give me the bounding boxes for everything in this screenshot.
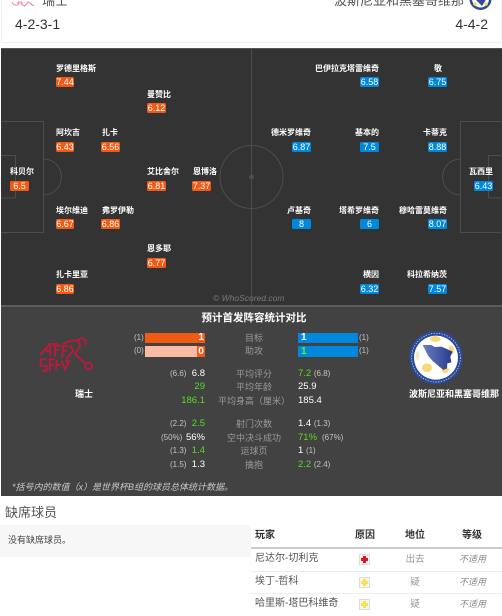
away goals bar: 1 <box>301 332 307 343</box>
player: 卡蒂克 <box>423 128 447 152</box>
icon: doubtful yellow cross <box>359 577 370 588</box>
player: 扎卡里亚: 扎卡里亚 <box>56 270 88 279</box>
stat: average age <box>194 381 316 392</box>
stat: tackles: 2.2 (2.4) <box>298 459 330 470</box>
stat: average rating: 7.2 (6.8) <box>298 368 330 379</box>
stat: average age: 平均年龄 <box>236 382 272 392</box>
player: 穆哈雷莫维奇: 穆哈雷莫维奇 <box>399 206 447 215</box>
row: 埃丁-哲科: 不适用 <box>459 577 486 587</box>
stat: average age: 25.9 <box>298 381 316 392</box>
player: 阿坎吉: 阿坎吉 <box>56 128 80 137</box>
player: 敬: 6.75 <box>429 77 446 87</box>
player: 科贝尔: 科贝尔 <box>10 167 34 176</box>
player: 横因: 横因 <box>363 270 379 279</box>
player: 阿坎吉: 6.43 <box>56 142 74 152</box>
stat: average age: 29 <box>194 381 205 392</box>
watermark: © WhoScored.com <box>213 293 284 303</box>
player: 横因 <box>360 270 379 294</box>
player: 卢基奇 <box>287 206 311 229</box>
header card: match teams and formations <box>1 0 502 43</box>
table headers: 地位 <box>405 530 425 541</box>
player: 塔希罗维奇 <box>339 206 379 229</box>
home crest <box>39 337 93 372</box>
stat: dribbles: 1.4 <box>192 445 205 456</box>
player: 巴伊拉克塔雷维奇: 6.58 <box>361 77 378 87</box>
player: 扎卡: 6.56 <box>102 142 119 152</box>
player: 巴伊拉克塔雷维奇 <box>315 64 379 87</box>
assists home prior: (0) <box>134 346 144 355</box>
stat: average height: 185.4 <box>298 395 322 406</box>
away assists bar: 1 <box>301 346 307 357</box>
table headers <box>255 528 482 541</box>
away team label: 波斯尼亚和黑塞哥维那 <box>409 389 499 399</box>
away formation: 4-4-2 <box>455 16 488 32</box>
stat: dribbles: (1.3) <box>170 446 186 455</box>
player: 埃尔维迪: 6.67 <box>56 219 74 229</box>
no missing players box <box>0 525 251 557</box>
away team players <box>271 64 493 294</box>
table header underline <box>251 547 502 549</box>
player: 扎卡: 扎卡 <box>102 128 118 137</box>
stats panel <box>1 305 502 496</box>
player: 瓦西里: 6.43 <box>475 181 492 191</box>
player: 卢基奇: 卢基奇 <box>287 206 311 215</box>
player: 塔希罗维奇: 6 <box>367 219 372 229</box>
stat: aerials won: 56% <box>186 432 205 443</box>
player: 扎卡里亚 <box>56 270 88 294</box>
player: 塔希罗维奇: 塔希罗维奇 <box>339 206 379 215</box>
player: 恩多耶: 恩多耶 <box>147 244 171 253</box>
row: 哈里斯-塔巴科维奇: 不适用 <box>459 599 486 609</box>
goals home prior: (1) <box>134 333 144 342</box>
row: 尼达尔-切利克: 出去 <box>405 554 424 565</box>
row: 埃丁-哲科 <box>0 576 502 590</box>
row: 哈里斯-塔巴科维奇: 哈里斯-塔巴科维奇 <box>255 598 338 609</box>
player: 恩多耶: 6.77 <box>148 258 165 268</box>
pitch lines <box>1 49 501 305</box>
home formation: 4-2-3-1 <box>15 16 60 32</box>
row: 尼达尔-切利克 <box>0 553 502 567</box>
player: 瓦西里 <box>469 167 493 191</box>
player: 卡蒂克: 8.88 <box>429 142 446 152</box>
player: 基本的: 7.5 <box>363 142 376 152</box>
player: 恩博洛: 恩博洛 <box>193 167 217 176</box>
icon: injury red cross <box>359 554 370 565</box>
assists comparison <box>134 346 369 357</box>
player: 罗德里格斯: 罗德里格斯 <box>56 64 96 73</box>
goals comparison <box>134 332 369 343</box>
row: 哈里斯-塔巴科维奇: 疑 <box>410 599 420 610</box>
stat: average height <box>181 395 322 406</box>
goals label: 目标 <box>245 333 263 343</box>
player: 卡蒂克: 卡蒂克 <box>423 128 447 137</box>
player: 巴伊拉克塔雷维奇: 巴伊拉克塔雷维奇 <box>315 64 379 73</box>
stat: average rating: 6.8 <box>192 368 205 379</box>
stat: tackles: 擒抱 <box>245 460 263 470</box>
player: 基本的 <box>355 128 379 152</box>
footnote: *括号内的数值（x）是世界杯B组的球员总体统计数据。 <box>12 482 233 492</box>
player: 罗德里格斯: 7.44 <box>56 77 74 87</box>
stats title: 预计首发阵容统计对比 <box>202 312 306 324</box>
player: 横因: 6.32 <box>361 284 378 294</box>
stat: average rating <box>170 368 330 379</box>
player: 扎卡里亚: 6.86 <box>56 284 74 294</box>
icon: doubtful yellow cross <box>359 599 370 610</box>
player: 埃尔维迪: 埃尔维迪 <box>56 206 88 215</box>
home goals bar <box>145 333 205 343</box>
home assists bar: 0 <box>198 346 204 357</box>
player: 基本的: 基本的 <box>355 128 379 137</box>
stat: aerials won <box>161 432 343 443</box>
home assists bar <box>145 346 205 357</box>
player: 瓦西里: 瓦西里 <box>469 167 493 176</box>
stat: aerials won: (67%) <box>322 433 343 442</box>
player: 科拉希纳茨: 科拉希纳茨 <box>407 270 447 279</box>
stat: tackles: (1.5) <box>170 460 186 469</box>
stat: shots: 射门次数 <box>236 419 272 429</box>
home team players <box>10 64 217 294</box>
player: 敬: 敬 <box>434 64 442 73</box>
stat: average rating: 平均评分 <box>236 369 272 379</box>
stat: average rating: (6.6) <box>170 369 186 378</box>
player: 罗德里格斯 <box>56 64 96 87</box>
player: 恩博洛: 7.37 <box>193 181 210 191</box>
player: 恩博洛 <box>192 167 217 191</box>
stat: shots: 1.4 (1.3) <box>298 418 330 429</box>
stat: tackles: 1.3 <box>192 459 205 470</box>
player: 弗罗伊勒 <box>101 206 134 229</box>
icon: home crest in header <box>12 0 34 7</box>
table headers: 原因 <box>355 530 375 541</box>
player: 埃尔维迪 <box>56 206 88 229</box>
table headers: 等级 <box>462 530 482 541</box>
goals away prior: (1) <box>359 333 369 342</box>
stat: tackles <box>170 459 330 470</box>
table headers: 玩家 <box>255 530 275 541</box>
missing players heading: 缺席球员 <box>5 505 57 520</box>
stat: shots: (2.2) <box>170 419 186 428</box>
player: 科贝尔 <box>10 167 34 191</box>
player: 弗罗伊勒: 6.86 <box>102 219 119 229</box>
player: 阿坎吉 <box>56 128 80 152</box>
player: 科贝尔: 6.5 <box>13 181 26 191</box>
stat: dribbles <box>170 445 316 456</box>
away goals bar <box>298 333 358 343</box>
player: 曼赞比 <box>147 90 171 113</box>
stat: dribbles: 运球页 <box>240 446 268 456</box>
stat: dribbles: 1 (1) <box>298 445 316 456</box>
player: 穆哈雷莫维奇: 8.07 <box>429 219 446 229</box>
player: 敬 <box>428 64 447 87</box>
player: 穆哈雷莫维奇 <box>399 206 447 229</box>
player: 艾比舍尔: 艾比舍尔 <box>147 167 179 176</box>
stat: shots: 2.5 <box>192 418 205 429</box>
assists label: 助攻 <box>245 346 263 356</box>
player: 德米罗维奇 <box>271 128 311 152</box>
row: 哈里斯-塔巴科维奇 <box>0 598 502 612</box>
player: 德米罗维奇: 德米罗维奇 <box>271 128 311 137</box>
stat: shots <box>170 418 330 429</box>
stat: aerials won: 空中决斗成功 <box>227 433 281 443</box>
player: 弗罗伊勒: 弗罗伊勒 <box>102 206 134 215</box>
player: 扎卡 <box>101 128 120 152</box>
player: 德米罗维奇: 6.87 <box>293 142 310 152</box>
row: 埃丁-哲科: 疑 <box>410 577 420 588</box>
away crest <box>409 331 463 384</box>
stat: average height: 平均身高（厘米） <box>218 396 290 406</box>
stat: average height: 186.1 <box>181 395 205 406</box>
no missing players text: 没有缺席球员。 <box>8 535 71 545</box>
home goals bar: 1 <box>198 332 204 343</box>
home team label: 瑞士 <box>75 389 93 399</box>
player: 曼赞比: 曼赞比 <box>147 90 171 99</box>
player: 曼赞比: 6.12 <box>148 103 165 113</box>
row: 尼达尔-切利克: 不适用 <box>459 554 486 564</box>
pitch panel <box>1 48 502 306</box>
player: 科拉希纳茨: 7.57 <box>429 284 446 294</box>
away assists bar <box>298 346 358 357</box>
stat: aerials won: (50%) <box>161 433 182 442</box>
player: 卢基奇: 8 <box>299 219 304 229</box>
stat: aerials won: 71% <box>298 432 317 443</box>
player: 科拉希纳茨 <box>407 270 447 294</box>
icon: away crest in header <box>470 0 492 10</box>
player: 恩多耶 <box>147 244 171 268</box>
player: 艾比舍尔 <box>147 166 179 191</box>
missing players table <box>251 547 502 594</box>
row: 埃丁-哲科: 埃丁-哲科 <box>255 576 298 587</box>
assists away prior: (1) <box>359 346 369 355</box>
row: 尼达尔-切利克: 尼达尔-切利克 <box>255 553 318 564</box>
player: 艾比舍尔: 6.81 <box>148 181 165 191</box>
